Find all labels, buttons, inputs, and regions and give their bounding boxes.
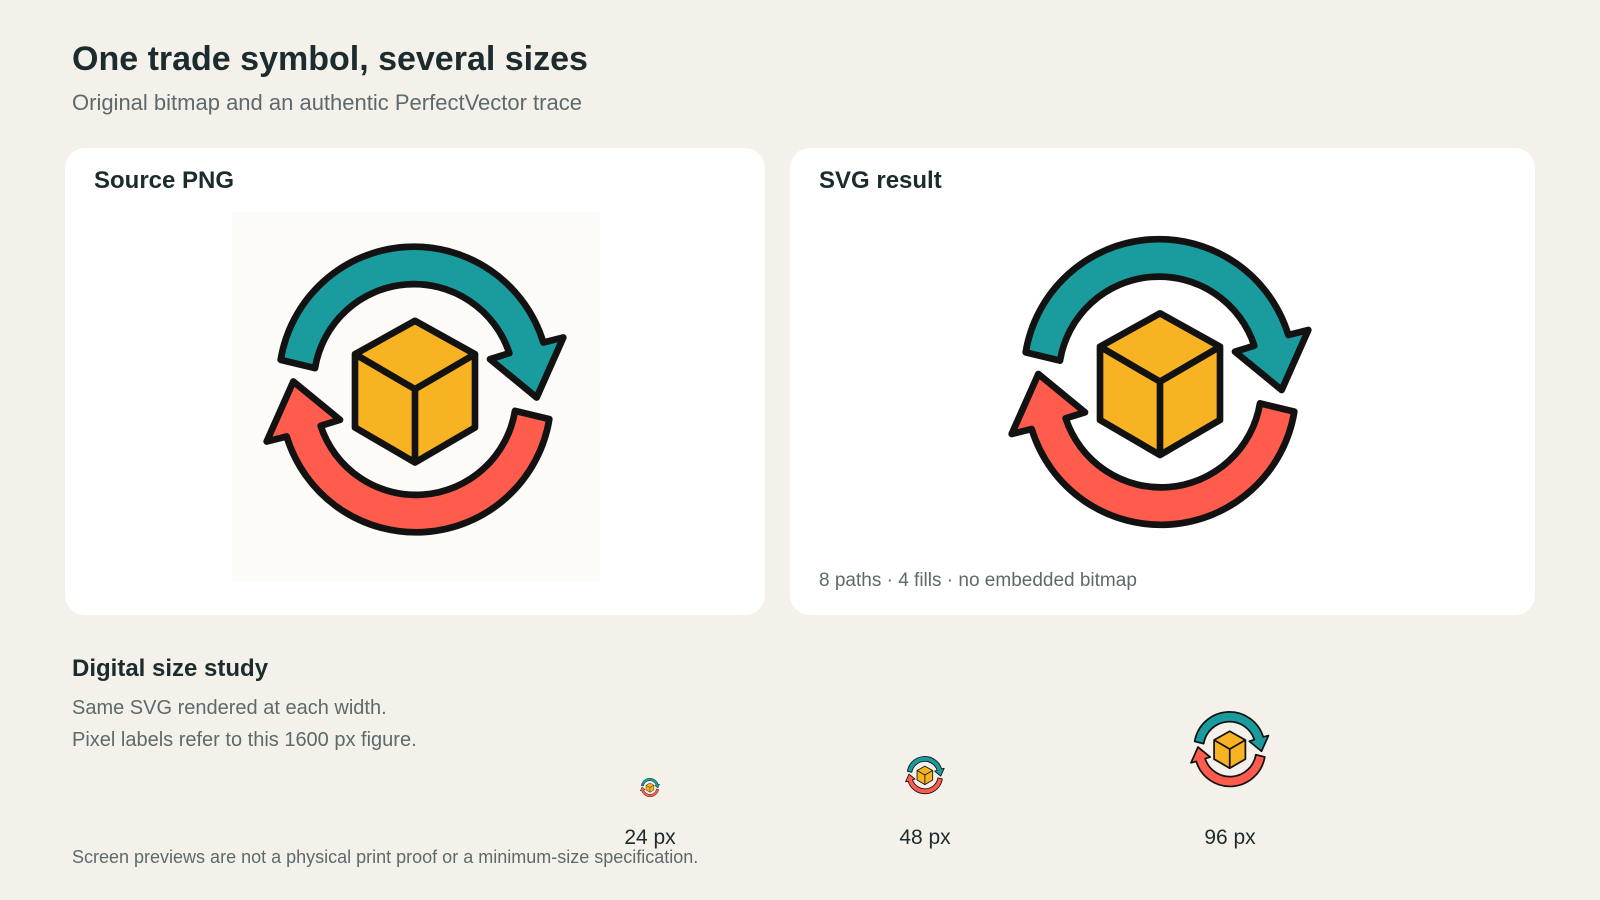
heading: digital size study: Digital size study (72, 655, 268, 682)
heading: SVG result: SVG result (819, 167, 942, 194)
label: 48 px: 48 px (899, 826, 951, 849)
icon: 48 px (905, 756, 945, 794)
title: One trade symbol, several sizes (72, 40, 588, 78)
description line 1: Same SVG rendered at each width. (72, 697, 387, 719)
icon definition (0, 0, 10, 10)
icon: 24 px (640, 778, 660, 798)
subtitle: Original bitmap and an authentic PerfectVector trace (72, 90, 582, 115)
description line 2: Pixel labels refer to this 1600 px figure. (72, 729, 417, 751)
source image with icon (232, 212, 600, 581)
label: 24 px: 24 px (624, 826, 676, 849)
panel: source PNG (65, 148, 765, 615)
footnote: Screen previews are not a physical print proof or a minimum-size specification. (72, 847, 698, 867)
panel: SVG result (790, 148, 1535, 615)
label: 96 px: 96 px (1204, 826, 1256, 849)
traced icon (1008, 236, 1312, 528)
heading: source PNG: Source PNG (94, 167, 234, 194)
icon: 96 px (1190, 711, 1270, 788)
caption: path stats: 8 paths · 4 fills · no embedded bitmap (819, 570, 1137, 591)
